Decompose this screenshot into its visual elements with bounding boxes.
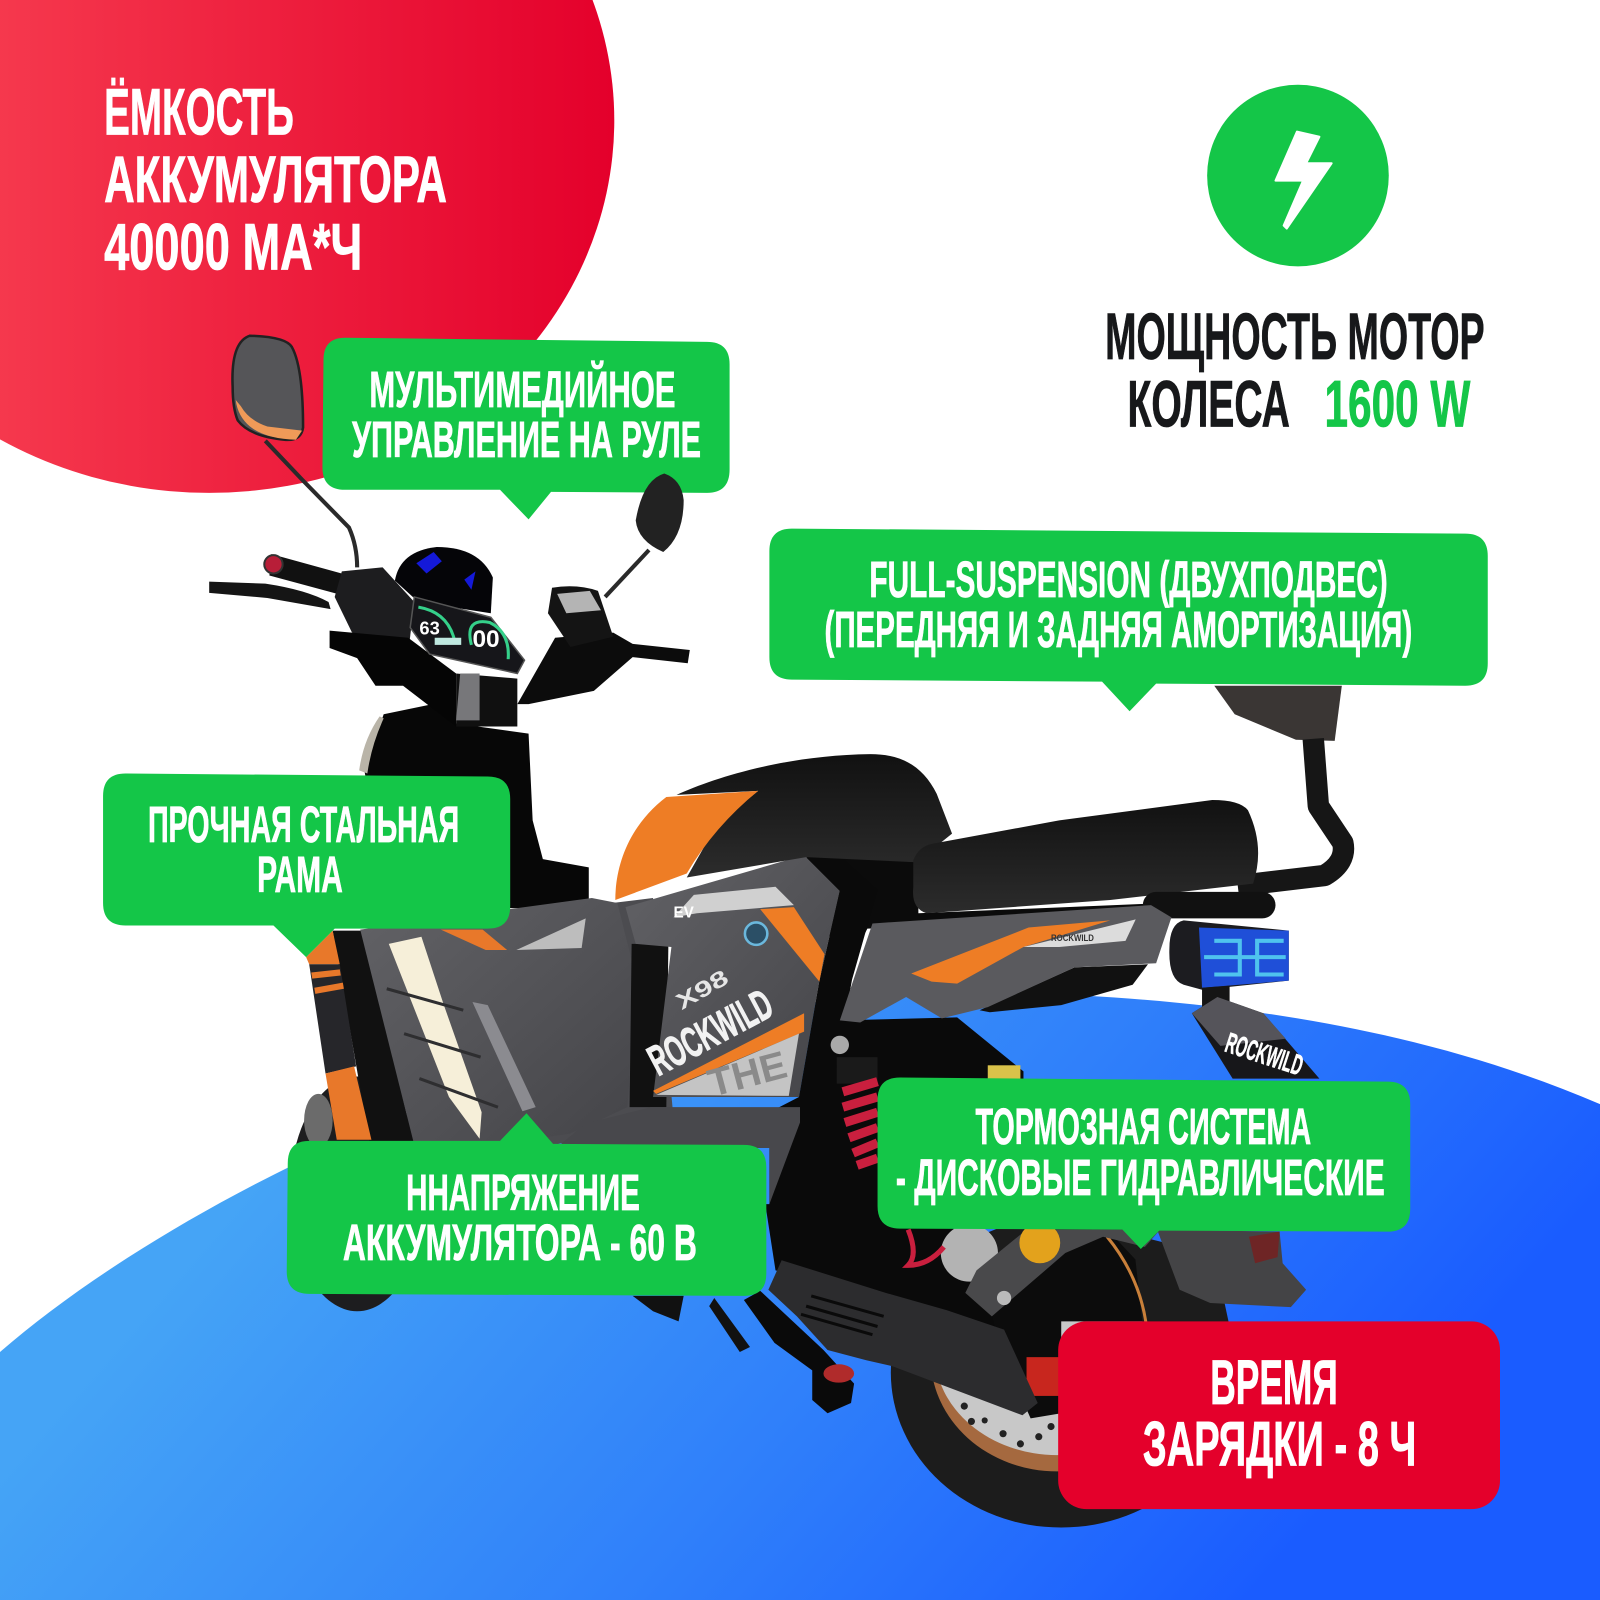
callout: charging time: ВРЕМЯ xyxy=(1210,1348,1338,1418)
panel LED strip xyxy=(389,937,482,1139)
axle bolt xyxy=(997,1291,1011,1305)
head dome xyxy=(395,547,493,613)
callout: battery voltage xyxy=(287,1113,766,1296)
callout: brake system: ТОРМОЗНАЯ СИСТЕМА xyxy=(976,1098,1311,1155)
rear seat xyxy=(913,800,1258,913)
heading: battery capacity: 40000 МА*Ч xyxy=(104,210,362,284)
rear side arm xyxy=(840,905,1171,1022)
main side panel xyxy=(626,853,878,1133)
rear mirror xyxy=(1214,686,1342,741)
lower cables xyxy=(330,631,456,727)
right mirror stem xyxy=(605,550,649,597)
tyre cover right side xyxy=(1133,1235,1230,1327)
right handlebar group xyxy=(517,550,690,704)
arm brand text: ROCKWILD xyxy=(1051,933,1094,943)
scooter illustration xyxy=(209,336,1343,1528)
phone screen xyxy=(557,591,601,613)
wheel rim arc xyxy=(1107,1237,1146,1322)
body filler between panels xyxy=(541,898,673,1148)
head stem xyxy=(456,673,517,727)
model badge: X98 xyxy=(672,965,733,1015)
black centre pillar xyxy=(630,944,668,1107)
rear fender tail xyxy=(1157,1230,1306,1307)
left switch cluster xyxy=(335,567,414,653)
left handlebar group xyxy=(209,336,456,727)
blue wave background xyxy=(0,992,1600,1600)
right mirror xyxy=(636,473,684,552)
callout: brake system xyxy=(878,1078,1410,1249)
callout: steel frame: ПРОЧНАЯ СТАЛЬНАЯ xyxy=(148,796,459,853)
arm orange strip xyxy=(911,920,1110,984)
front body panel xyxy=(360,898,636,1148)
front seat xyxy=(615,754,952,900)
rear light xyxy=(1169,920,1289,990)
heading: battery capacity: ЁМКОСТЬ xyxy=(104,76,294,150)
license plate bracket xyxy=(1192,986,1319,1082)
red corner shape xyxy=(0,0,614,493)
under-seat tail dark xyxy=(980,964,1148,1012)
dashboard display xyxy=(410,597,524,673)
yellow detail xyxy=(988,1065,1020,1082)
callout: charging time xyxy=(1058,1321,1500,1509)
black rear pillar xyxy=(799,853,878,1133)
right grip and bracket xyxy=(517,633,690,704)
rear fender arm xyxy=(965,1222,1160,1316)
left mirror stem xyxy=(265,441,357,567)
footboard xyxy=(768,1260,1038,1415)
heading: motor power xyxy=(1105,300,1485,442)
arm white label xyxy=(1023,919,1136,947)
panel silver accent xyxy=(516,918,586,950)
reflector xyxy=(1019,1222,1060,1263)
brake lever xyxy=(209,582,331,609)
lower frame under bubble xyxy=(633,1296,750,1352)
LED slats xyxy=(387,989,498,1107)
engine dark area xyxy=(765,1204,995,1327)
X98 decal xyxy=(472,1002,536,1111)
phone holder xyxy=(548,586,613,647)
heading: battery capacity xyxy=(104,76,447,284)
rear suspension black frame xyxy=(769,1017,1023,1224)
brake cables xyxy=(908,1230,944,1265)
callout: charging time: ЗАРЯДКИ - 8 Ч xyxy=(1143,1409,1416,1479)
heading: motor power: КОЛЕСА xyxy=(1128,368,1290,442)
callout: multimedia control xyxy=(322,338,730,519)
caliper xyxy=(1027,1357,1059,1396)
left grip xyxy=(269,554,349,597)
dashboard display: 00 xyxy=(472,626,500,653)
grip red end xyxy=(264,555,283,573)
callout: steel frame xyxy=(103,773,510,957)
under-seat black filler xyxy=(806,852,1163,980)
small brake disc xyxy=(941,1224,998,1282)
white stripe xyxy=(673,887,794,917)
seat orange section xyxy=(615,791,758,900)
icon: lightning bolt in green circle xyxy=(1207,85,1389,266)
rear backrest bar xyxy=(1238,739,1343,886)
rear hub dark area xyxy=(980,1235,1145,1418)
brand lettering: ROCKWILD xyxy=(640,980,781,1085)
orange side band xyxy=(760,907,824,982)
silver lower area xyxy=(656,1034,799,1096)
heading: motor power: 1600 W xyxy=(1324,368,1471,442)
left mirror xyxy=(232,336,303,440)
orange diagonal xyxy=(653,1013,804,1094)
callout: battery voltage: АККУМУЛЯТОРА - 60 В xyxy=(343,1214,697,1271)
plate brand text: ROCKWILD xyxy=(1221,1027,1307,1082)
callout: steel frame: РАМА xyxy=(257,846,343,903)
EV label: EV xyxy=(673,904,695,921)
front shell highlight xyxy=(359,716,384,773)
rack xyxy=(1143,892,1276,918)
THE lettering: THE xyxy=(703,1043,791,1106)
panel orange accent xyxy=(441,930,507,950)
left mirror orange edge xyxy=(236,400,302,440)
callout: full suspension xyxy=(769,529,1488,711)
heading: battery capacity: АККУМУЛЯТОРА xyxy=(104,143,447,217)
tail reflector xyxy=(1249,1232,1280,1263)
front fork xyxy=(306,931,371,1140)
rear tyre and disc xyxy=(891,1217,1232,1528)
callout: battery voltage: ННАПРЯЖЕНИЕ xyxy=(406,1164,640,1221)
dashboard display: 63 xyxy=(419,618,440,639)
kick stand xyxy=(744,1291,854,1413)
power button xyxy=(745,922,767,945)
dome blue reflections xyxy=(416,552,476,590)
callout: multimedia control: МУЛЬТИМЕДИЙНОЕ xyxy=(369,360,676,418)
front wheel xyxy=(290,1077,424,1311)
fork black column xyxy=(333,931,413,1141)
shock absorber xyxy=(831,1036,878,1165)
callout: multimedia control: УПРАВЛЕНИЕ НА РУЛЕ xyxy=(352,411,701,468)
lower centre body xyxy=(556,1107,800,1204)
front dark box xyxy=(364,704,589,908)
